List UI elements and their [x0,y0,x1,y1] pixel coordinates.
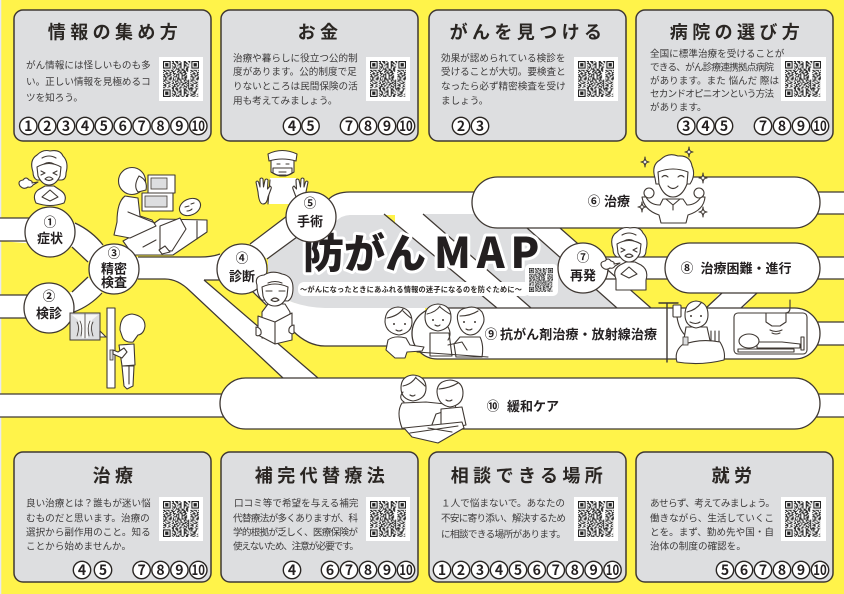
body text: 良い治療とは？誰もが迷い悩 [26,498,151,510]
body text [650,48,785,114]
node 4 diagnosis [217,244,267,294]
label 10 palliative care: ⑩ [487,400,500,414]
chapter badges: 5 [306,116,315,136]
chapter badges: 6 [119,116,127,136]
panel: treatment: 治療 [93,466,137,486]
chapter badges: 4 [701,116,710,136]
body text: 度があります。公的制度で足 [233,66,357,78]
capsule labels [485,194,792,414]
main title latin: MAP [434,220,545,281]
illustration: worried person at recurrence [601,228,647,290]
panel: information gathering [14,10,211,141]
chapter badges: 5 [99,560,107,580]
body text: セカンドオピニオンという方法 [650,88,774,100]
chapter badges: 6 [533,560,541,580]
node 4 diagnosis: ④ [236,252,249,266]
panel: finding cancer [429,10,626,141]
panel: employment [636,452,833,582]
chapter badges: 7 [345,560,353,580]
chapter badges: 8 [778,560,786,580]
chapter badges: 4 [495,560,503,580]
body text [233,498,359,552]
chapter badges [678,116,829,136]
capsule: 6 treatment [472,177,820,228]
body text: 治療や暮らしに役立つ公的制 [233,52,358,64]
QR code [159,497,203,541]
chapter badges: 7 [759,560,767,580]
body text: がん情報には怪しいものも多 [26,60,151,72]
chapter badges: 6 [740,560,748,580]
chapter badges: 10 [606,560,619,580]
node 2 screening [24,283,74,333]
QR code [366,57,410,101]
body text: ましょう。 [441,96,488,107]
chapter badges [20,116,207,136]
node 1 symptoms: ① [44,216,57,230]
panel: employment: 就労 [712,466,756,486]
QR code [366,497,410,541]
body text: 全国に標準治療を受けることが [650,48,785,60]
panel: choosing a hospital: 病院の選び方 [670,22,804,42]
node 5 surgery [286,192,336,242]
sparkles [638,147,707,217]
chapter badges [452,116,489,136]
body text: に相談できる場所があります。 [441,528,566,540]
body text [26,498,151,552]
illustration: radiation therapy machine [734,300,807,354]
chapter badges: 10 [192,116,205,136]
QR code [574,497,618,541]
capsule: 8 difficult treatment [665,243,820,293]
body text: できる、がん診療連携拠点病院 [650,62,774,74]
panel: money [221,10,418,141]
chapter badges: 3 [682,116,690,136]
node 3 detailed exam: ③ [108,246,121,260]
body text: ツを知ろう。 [26,92,83,104]
body text [650,498,775,552]
chapter badges: 9 [797,116,805,136]
body text: 受けることが大切。要検査と [441,66,566,78]
label 8 difficult treatment: ⑧ [681,262,694,276]
illustration: surgeon raising hands [256,150,308,204]
chapter badges [283,560,415,580]
title QR code [529,268,553,292]
chapter badges [283,116,415,136]
node 3 detailed exam [89,244,139,294]
body text [441,52,566,107]
panel: complementary and alternative therapy [221,452,418,582]
node 2 screening: 検診 [36,306,62,321]
body text: 不安に寄り添い、解決するため [441,512,566,524]
capsule: 9 chemo and radiation [412,308,820,359]
chapter badges: 9 [383,116,391,136]
body text: 働きながら、生活していくこ [650,512,774,524]
illustration: happy recovered man [638,147,707,223]
chapter badges: 2 [457,116,465,136]
chapter badges [716,560,829,580]
chapter badges: 3 [476,560,484,580]
title block [298,220,558,296]
chapter badges: 7 [137,116,146,136]
chapter badges: 8 [778,116,786,136]
chapter badges: 5 [100,116,108,136]
body text: があります。 [650,102,707,114]
node 1 symptoms: 症状 [37,231,63,246]
chapter badges: 4 [288,116,296,136]
node circles [24,192,608,333]
body text: なったら必ず精密検査を受け [441,80,566,92]
body text: 学的根拠が乏しく、医療保険が [233,526,358,538]
main title: 防がん [303,220,426,280]
illustration: chest x-ray [70,308,145,389]
label 6 treatment: 治療 [604,194,630,209]
body text: あせらず、考えてみましょう。 [650,498,775,510]
chapter badges [73,560,207,580]
body text [441,498,566,540]
body text [233,52,358,107]
node 1 symptoms [25,207,75,257]
chapter badges: 10 [399,560,413,580]
QR code [781,57,826,101]
panel: information gathering: 情報の集め方 [48,22,182,42]
chapter badges: 9 [383,560,391,580]
body text: い。正しい情報を見極めるコ [26,76,151,88]
illustration: three people talking [385,304,488,358]
chapter badges: 2 [43,116,51,136]
label 6 treatment: ⑥ [588,194,601,208]
chapter badges: 4 [78,560,86,580]
chapter badges [433,560,621,580]
body text: 選択から副作用のこと。知る [26,526,151,538]
chapter badges: 8 [156,116,165,136]
label 9 chemo radiation: ⑨ [485,328,498,342]
road network [0,177,844,429]
QR code [574,57,618,101]
node 3 detailed exam: 精密 [101,262,127,276]
body text: 効果が認められている検診を [441,52,565,64]
chapter badges: 5 [721,560,729,580]
chapter badges: 9 [175,560,184,580]
chapter badges: 8 [364,116,372,136]
body text: ことから始めませんか。 [26,540,131,552]
chapter badges: 7 [759,116,767,136]
node 7 recurrence: ⑦ [577,250,590,264]
node 4 diagnosis: 診断 [229,269,255,284]
body text: 使えないため、注意が必要です。 [233,540,359,552]
chapter badges: 7 [137,560,146,580]
chapter badges: 7 [552,560,560,580]
panel: complementary and alternative therapy: 補完代替療法 [255,466,389,486]
body text: があります。また 悩んだ 際は [650,75,779,87]
chapter badges: 7 [345,116,353,136]
node 7 recurrence: 再発 [570,268,596,283]
chapter badges: 9 [589,560,598,580]
panel: places to consult: 相談できる場所 [451,466,607,486]
panel: treatment [14,452,211,582]
node 5 surgery: ⑤ [304,196,317,210]
chapter badges: 5 [514,560,522,580]
illustration: reading patient [256,272,294,344]
chapter badges: 8 [571,560,579,580]
chapter badges: 10 [813,560,827,580]
illustration: palliative care pair [399,375,466,443]
QR code [781,497,826,541]
node 7 recurrence [558,243,608,293]
chapter badges: 6 [326,560,334,580]
chapter badges: 2 [457,560,465,580]
chapter badges: 10 [399,116,413,136]
body text: とを。まず、勤め先や国・自 [650,526,774,538]
chapter badges: 4 [81,116,89,136]
subtitle: ～がんになったときにあふれる情報の迷子になるのを防ぐために～ [300,285,522,295]
panel: finding cancer: がんを見つける [450,22,606,42]
panel: money: お金 [298,22,342,42]
illustration: patient with IV drip [659,301,724,364]
label 10 palliative care: 緩和ケア [507,399,559,414]
capsule: 10 palliative care [220,378,820,429]
body text: 用も考えてみましょう。 [233,96,337,107]
panel: places to consult [429,452,626,582]
chapter badges: 1 [438,560,446,580]
body text: 口コミ等で希望を与える補完 [234,498,359,510]
chapter badges: 9 [175,116,184,136]
node 3 detailed exam: 検査 [101,275,127,290]
chapter badges: 8 [364,560,372,580]
chapter badges: 5 [720,116,728,136]
panel: choosing a hospital [636,10,833,141]
body text: りないところは民間保険の活 [233,80,358,92]
illustration: ultrasound exam [114,168,207,255]
chapter badges: 4 [288,560,296,580]
body text: 代替療法が多くありますが、科 [233,512,358,524]
illustration: person with symptoms [19,150,67,206]
chapter badges: 1 [24,116,32,136]
node 5 surgery: 手術 [297,214,323,229]
chapter badges: 9 [797,560,805,580]
label 9 chemo radiation: 抗がん剤治療・放射線治療 [500,327,657,342]
body text: １人で悩まないで。あなたの [441,498,565,510]
node 2 screening: ② [43,290,56,304]
body text [26,60,151,104]
chapter badges: 3 [476,116,484,136]
body text: むものだと思います。治療の [26,512,150,524]
chapter badges: 10 [813,116,827,136]
QR code [159,57,203,101]
chapter badges: 10 [192,560,205,580]
label 6 treatment [588,194,630,209]
chapter badges: 8 [156,560,165,580]
body text: 治体の制度の確認を。 [650,540,746,552]
chapter badges: 3 [62,116,70,136]
label 8 difficult treatment: 治療困難・進行 [700,261,792,276]
